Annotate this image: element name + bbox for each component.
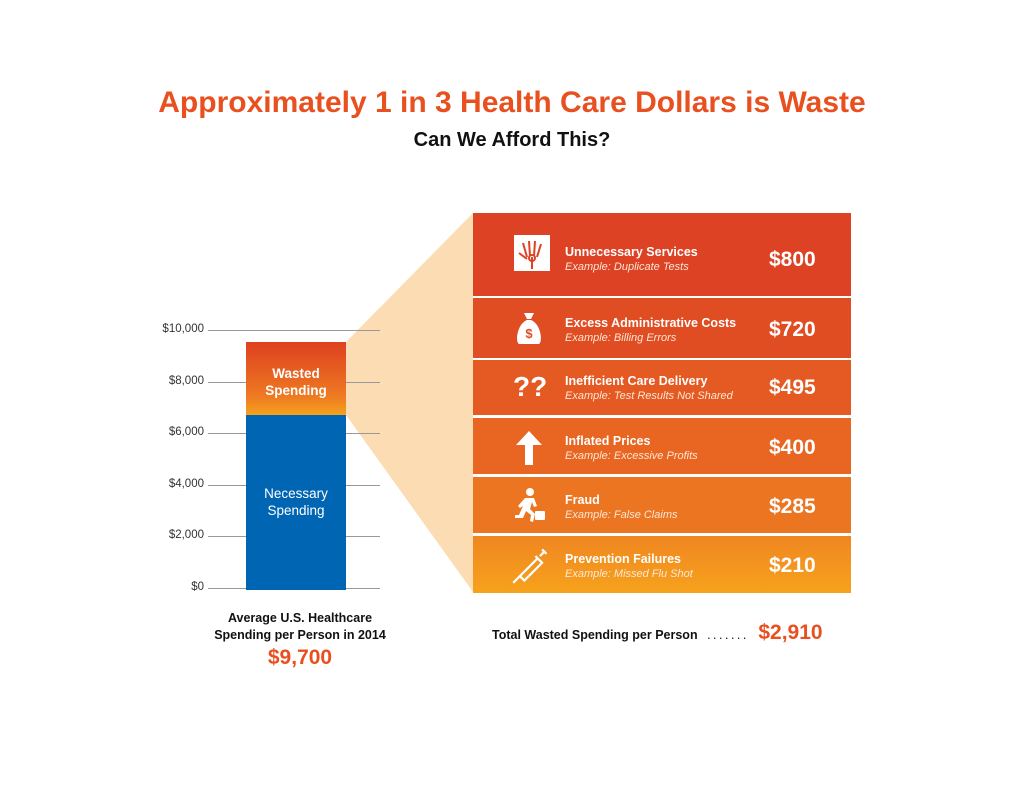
- row: inflated prices: Inflated Prices: [565, 434, 650, 448]
- bar: wasted spending: [246, 342, 346, 415]
- row: inflated prices: [473, 418, 851, 474]
- title: Approximately 1 in 3 Health Care Dollars is Waste: [158, 86, 866, 119]
- bar: wasted spending: Wasted: [272, 366, 320, 381]
- bar chart: [162, 323, 380, 593]
- row: unnecessary services: [473, 213, 851, 296]
- row: inflated prices: $400: [769, 436, 816, 459]
- row: fraud: Fraud: [565, 493, 600, 507]
- row: inefficient care: Inefficient Care Delivery: [565, 374, 707, 388]
- caption: average spending: Spending per Person in 2014: [214, 628, 386, 642]
- caption: average spending: $9,700: [268, 646, 332, 669]
- row: fraud: Example: False Claims: [565, 509, 677, 521]
- caption: average spending: Average U.S. Healthcare: [228, 611, 372, 625]
- row: unnecessary services: Unnecessary Services: [565, 245, 698, 259]
- bar chart: $2,000: [169, 529, 204, 541]
- row: inflated prices: Example: Excessive Profits: [565, 450, 698, 462]
- caption: average spending: [214, 611, 386, 669]
- panel: waste categories: [473, 213, 851, 593]
- icon: x-ray hand: [514, 235, 550, 271]
- bar chart: $0: [191, 581, 204, 593]
- row: prevention failures: [473, 536, 851, 593]
- bar chart: $8,000: [169, 375, 204, 387]
- icon: question marks: ??: [513, 371, 547, 402]
- row: admin costs: [473, 298, 851, 358]
- row: fraud: [473, 477, 851, 533]
- bar: necessary spending: Necessary: [264, 486, 328, 501]
- bar: necessary spending: Spending: [267, 503, 325, 518]
- subtitle: Can We Afford This?: [414, 129, 610, 151]
- row: unnecessary services: Example: Duplicate Tests: [565, 261, 689, 273]
- row: prevention failures: Example: Missed Flu Shot: [565, 568, 693, 580]
- icon: running man: [515, 488, 545, 522]
- row: admin costs: $720: [769, 318, 816, 341]
- total wasted spending: Total Wasted Spending per Person ....... $2,910: [492, 621, 823, 644]
- bar: wasted spending: Spending: [265, 383, 327, 398]
- bar chart: $6,000: [169, 426, 204, 438]
- row: unnecessary services: $800: [769, 248, 816, 271]
- row: fraud: $285: [769, 495, 816, 518]
- bar chart: $10,000: [162, 323, 204, 335]
- row: admin costs: Example: Billing Errors: [565, 332, 676, 344]
- bar: necessary spending: [246, 415, 346, 590]
- bar chart: $4,000: [169, 478, 204, 490]
- row: inefficient care: $495: [769, 376, 816, 399]
- row: inefficient care: [473, 360, 851, 415]
- row: prevention failures: $210: [769, 554, 816, 577]
- icon: money bag: $: [525, 326, 533, 341]
- row: prevention failures: Prevention Failures: [565, 552, 681, 566]
- row: inefficient care: Example: Test Results Not Shared: [565, 390, 733, 402]
- row: admin costs: Excess Administrative Costs: [565, 316, 736, 330]
- icon: up arrow: [516, 431, 542, 465]
- icon: syringe: [512, 548, 548, 584]
- icon: money bag: [517, 313, 541, 344]
